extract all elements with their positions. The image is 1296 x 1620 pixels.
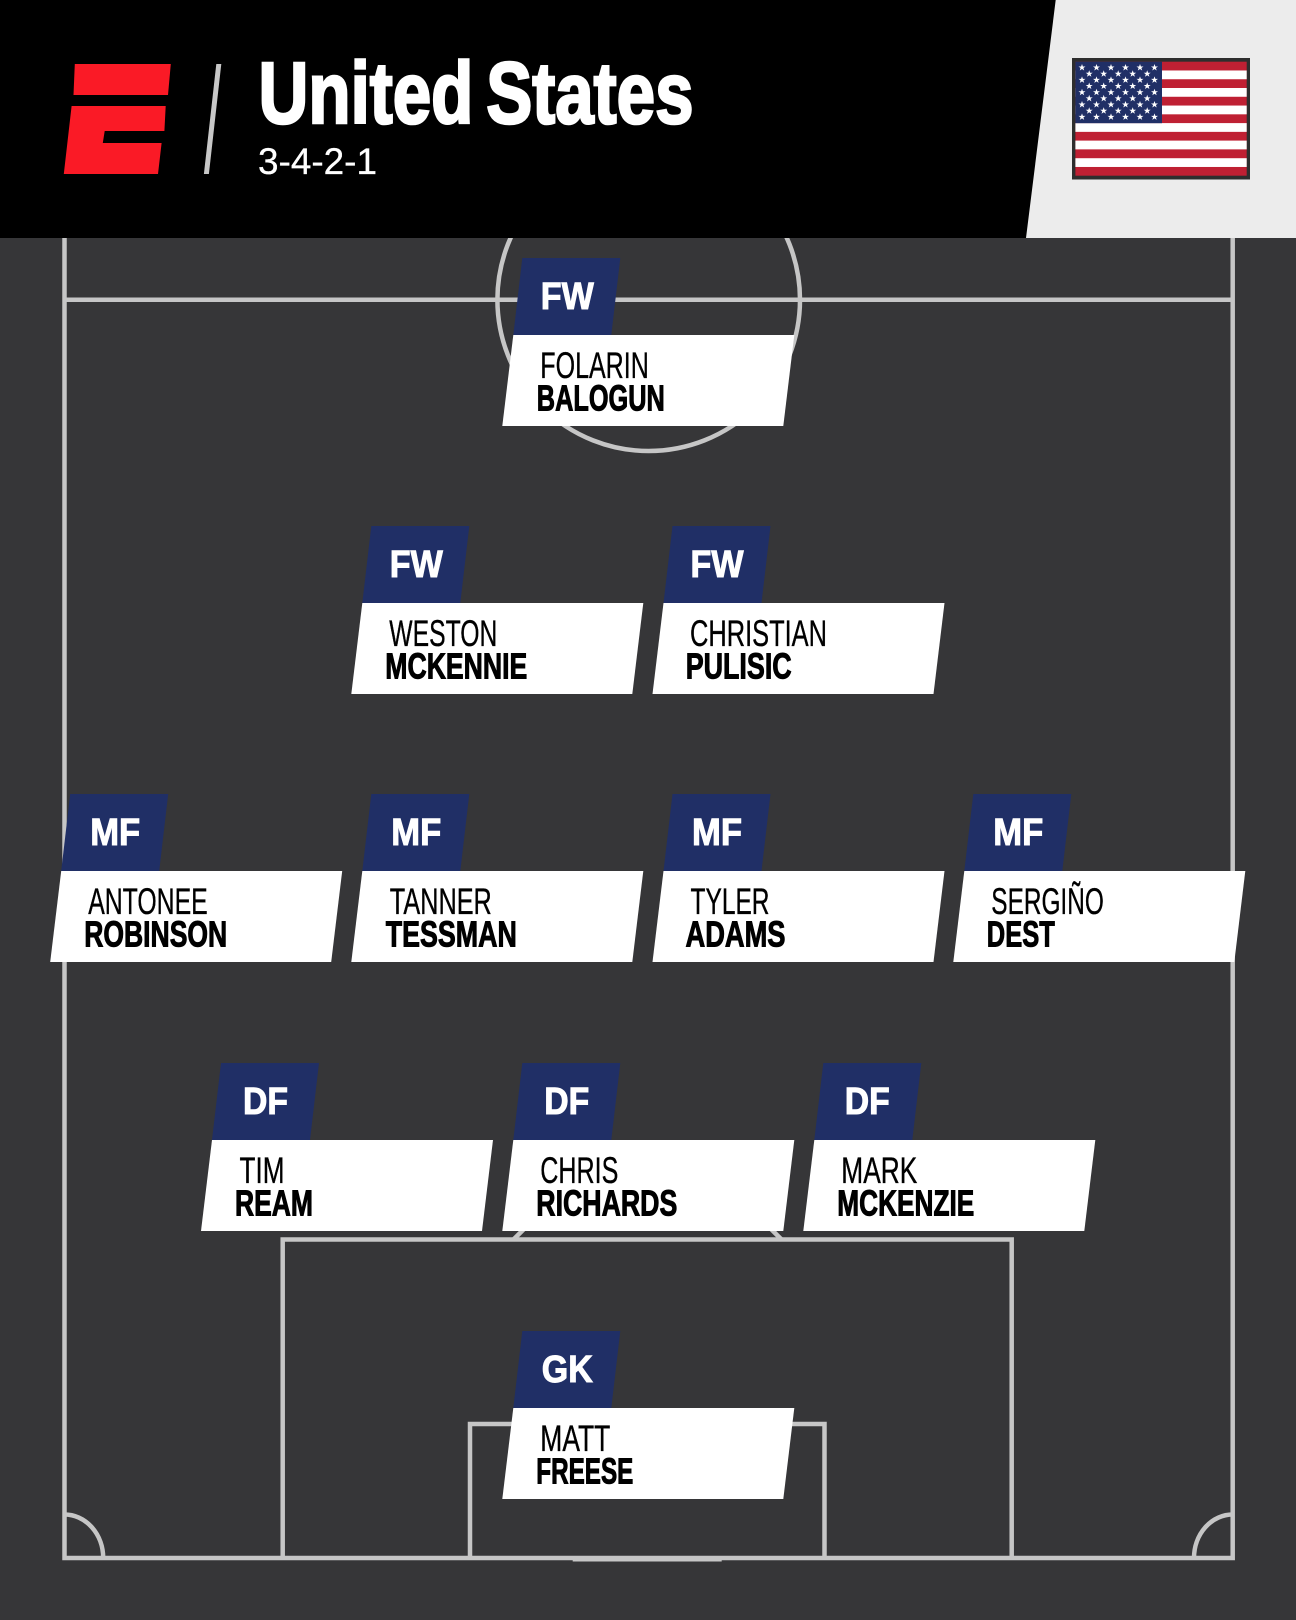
- player card: Antonee Robinson: [50, 794, 342, 962]
- first name: WESTON: [389, 613, 497, 654]
- first name: MATT: [540, 1418, 610, 1459]
- name plate: [502, 1408, 794, 1499]
- name plate: [502, 335, 794, 426]
- formation: 3-4-2-1: [258, 141, 377, 182]
- position: FW: [690, 544, 744, 586]
- first name: TIM: [240, 1150, 284, 1191]
- player card: Tim Ream: [201, 1063, 493, 1231]
- first name: TANNER: [390, 881, 492, 922]
- last name: BALOGUN: [537, 378, 665, 418]
- player card: Weston McKennie: [351, 526, 643, 694]
- position tag: [362, 526, 469, 603]
- position tag: [814, 1063, 921, 1140]
- pitch markings: [64, 148, 1233, 1561]
- player card: Tanner Tessman: [351, 794, 643, 962]
- first name: CHRISTIAN: [690, 613, 827, 654]
- player card: Matt Freese: [502, 1331, 794, 1499]
- last name: MCKENZIE: [837, 1182, 974, 1224]
- position tag: [964, 794, 1071, 871]
- name plate: [351, 871, 643, 962]
- name plate: [50, 871, 342, 962]
- name plate: [652, 603, 944, 694]
- position: MF: [993, 812, 1043, 854]
- last name: DEST: [987, 914, 1055, 954]
- name plate: [803, 1140, 1095, 1231]
- position: FW: [541, 276, 594, 318]
- position tag: [212, 1063, 319, 1140]
- first name: MARK: [841, 1150, 918, 1191]
- player card: Chris Richards: [502, 1063, 794, 1231]
- position tag: [513, 1063, 620, 1140]
- name plate: [351, 603, 643, 694]
- position tag: [362, 794, 469, 871]
- player card: Christian Pulisic: [652, 526, 944, 694]
- last name: ADAMS: [686, 914, 786, 954]
- icon: United States flag: [1072, 58, 1250, 180]
- last name: FREESE: [536, 1450, 633, 1492]
- last name: MCKENNIE: [385, 646, 527, 686]
- first name: FOLARIN: [540, 345, 649, 386]
- position: DF: [544, 1081, 589, 1123]
- position tag: [513, 1331, 620, 1408]
- last name: RICHARDS: [536, 1182, 677, 1224]
- name plate: [502, 1140, 794, 1231]
- first name: TYLER: [690, 881, 770, 922]
- first name: CHRIS: [540, 1150, 618, 1191]
- last name: ROBINSON: [84, 914, 227, 954]
- name plate: [201, 1140, 493, 1231]
- divider slash: [204, 64, 221, 174]
- last name: REAM: [235, 1182, 313, 1224]
- position tag: [664, 794, 770, 871]
- name plate: [652, 871, 944, 962]
- first name: SERGIÑO: [991, 881, 1104, 922]
- position: MF: [692, 812, 742, 854]
- first name: ANTONEE: [88, 881, 208, 922]
- position: FW: [390, 544, 443, 586]
- player card: Sergiño Dest: [953, 794, 1245, 962]
- position: GK: [542, 1349, 593, 1391]
- player card: Tyler Adams: [652, 794, 944, 962]
- position: DF: [243, 1081, 288, 1123]
- position: DF: [845, 1081, 890, 1123]
- name plate: [953, 871, 1245, 962]
- position tag: [61, 794, 168, 871]
- icon: ESPN logo: [64, 64, 171, 174]
- player card: Mark McKenzie: [803, 1063, 1095, 1231]
- last name: TESSMAN: [386, 914, 517, 954]
- header band: [0, 0, 1296, 238]
- position: MF: [391, 812, 441, 854]
- last name: PULISIC: [686, 646, 792, 686]
- position tag: [513, 258, 620, 335]
- position tag: [664, 526, 770, 603]
- player card: Folarin Balogun: [502, 258, 794, 426]
- title: United States: [258, 45, 694, 142]
- position: MF: [90, 812, 140, 854]
